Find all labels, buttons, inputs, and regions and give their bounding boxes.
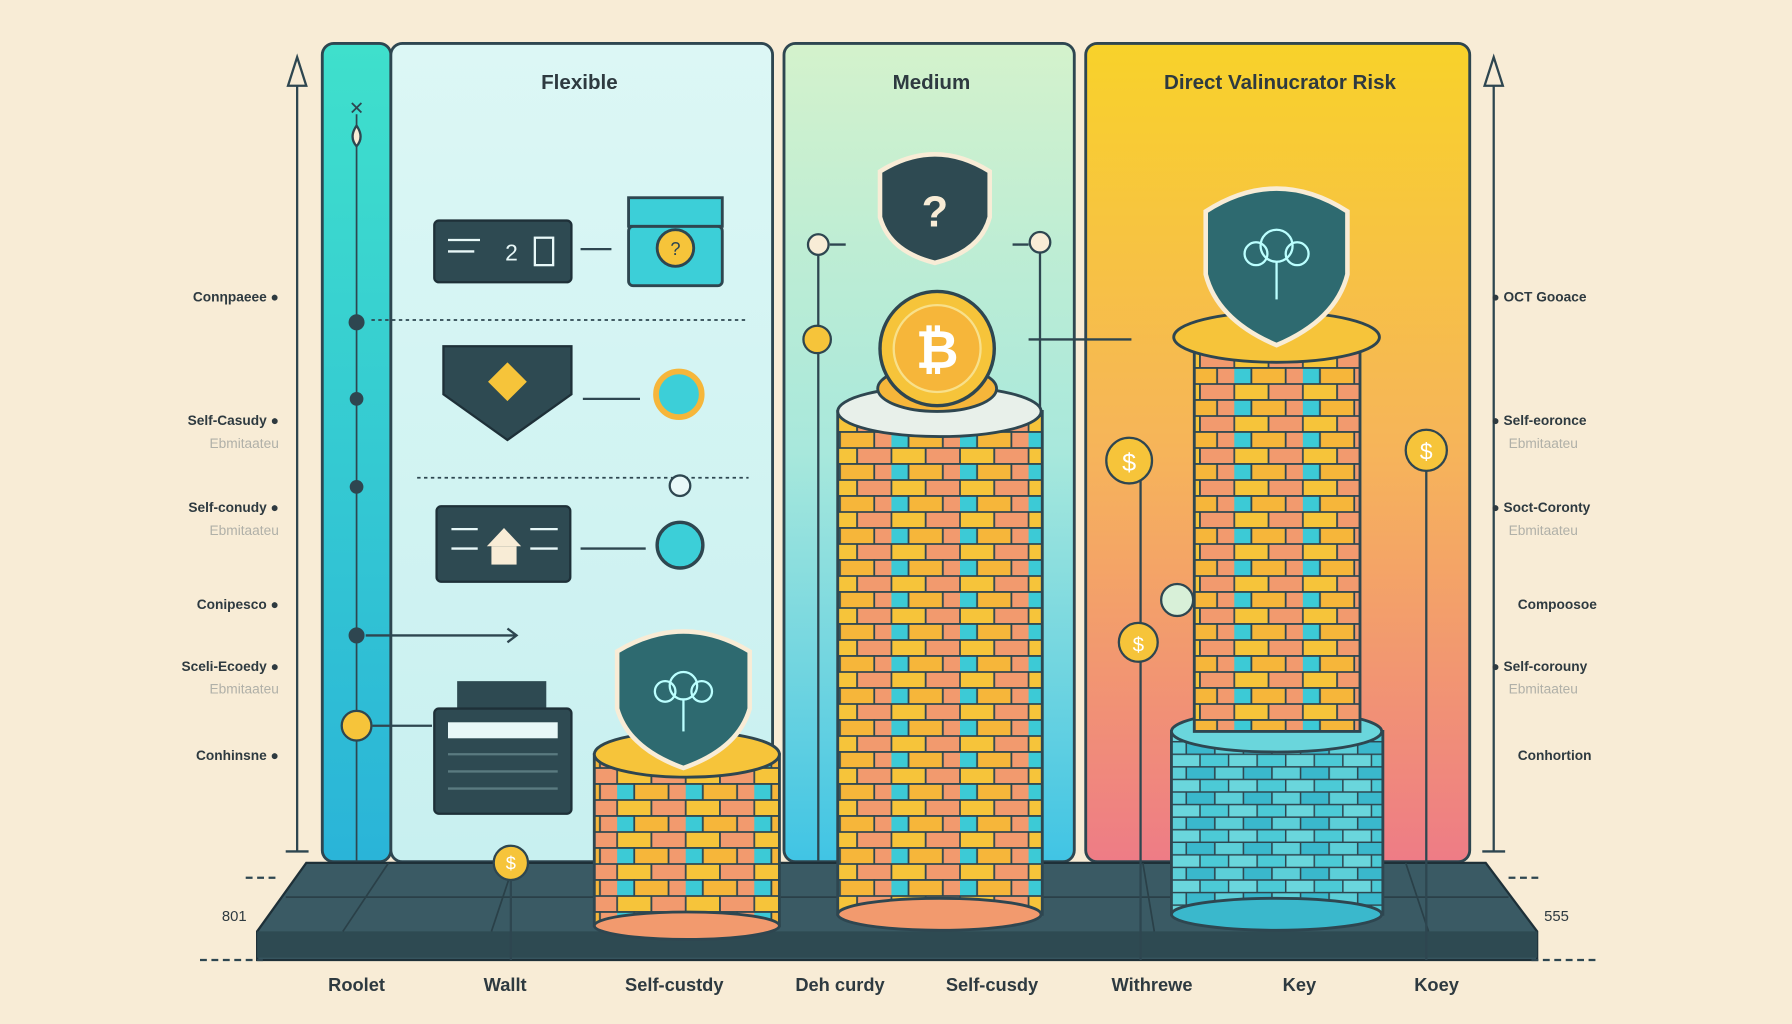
- icon: card: 2: [505, 240, 518, 266]
- stack: medium: [838, 291, 1042, 930]
- left axis labels: Conipesco ●: [197, 597, 279, 612]
- left strip: [322, 43, 391, 960]
- right axis labels: ● OCT Gooace: [1491, 290, 1587, 305]
- stack: small: $: [506, 853, 516, 874]
- left axis labels: Conηpaeee ●: [193, 290, 279, 305]
- panel: flexible: [366, 43, 773, 862]
- right axis labels: Conhortion: [1518, 748, 1592, 763]
- right axis arrow: [1482, 57, 1505, 851]
- heading: direct risk: Direct Valinucrator Risk: [1164, 71, 1397, 94]
- base platform: [200, 863, 1600, 960]
- icon: shield tree large: [1206, 189, 1347, 345]
- icon: shield question: ?: [922, 188, 948, 236]
- right axis labels: ● Self-eoronce: [1491, 413, 1587, 428]
- left axis labels: Sceli-Ecoedy ●: [181, 659, 279, 674]
- panel: medium: [784, 43, 1074, 960]
- bottom labels: Roolet: [328, 974, 385, 995]
- right axis labels: ● Soct-Coronty: [1491, 500, 1591, 515]
- icon: window coin: [629, 198, 722, 286]
- bottom labels: Self-cusdy: [946, 974, 1039, 995]
- left axis labels: Ebmitaateu: [210, 682, 279, 697]
- stack: large: [1106, 189, 1447, 960]
- bottom labels: Key: [1283, 974, 1317, 995]
- stack: large: $: [1420, 438, 1433, 464]
- icon: house card: [437, 475, 703, 582]
- heading: medium: Medium: [893, 71, 970, 94]
- icon: bitcoin coin: ₿: [916, 321, 959, 380]
- arrow: [366, 629, 517, 642]
- right axis labels: Ebmitaateu: [1509, 436, 1578, 451]
- panel: direct risk: [1029, 43, 1470, 862]
- icon: shield diamond: [443, 346, 702, 440]
- right axis labels: Compoosoe: [1518, 597, 1597, 612]
- left axis arrow: [286, 57, 309, 851]
- left axis labels: Self-conudy ●: [188, 500, 279, 515]
- left axis labels: Ebmitaateu: [210, 523, 279, 538]
- right axis labels: [1491, 290, 1597, 763]
- left axis labels: Ebmitaateu: [210, 436, 279, 451]
- right axis labels: ● Self-corouny: [1491, 659, 1588, 674]
- left strip: ✕: [349, 97, 364, 118]
- bottom labels: Wallt: [484, 974, 527, 995]
- base platform: 555: [1544, 909, 1569, 925]
- right axis labels: Ebmitaateu: [1509, 523, 1578, 538]
- left axis labels: Self-Casudy ●: [188, 413, 279, 428]
- bottom labels: Deh curdy: [795, 974, 885, 995]
- bottom labels: [328, 974, 1460, 995]
- bottom labels: Koey: [1414, 974, 1460, 995]
- base platform: 801: [222, 909, 247, 925]
- icon: bitcoin coin: [878, 291, 997, 411]
- icon: card: [434, 221, 611, 282]
- bottom labels: Withrewe: [1111, 974, 1193, 995]
- heading: flexible: Flexible: [541, 71, 618, 94]
- icon: shield tree: [617, 631, 750, 768]
- icon: shield question: [880, 154, 990, 263]
- icon: wallet: [373, 681, 571, 814]
- left axis labels: Conhinsne ●: [196, 748, 279, 763]
- stack: large: $: [1133, 633, 1145, 656]
- icon: window coin: ?: [670, 238, 681, 259]
- stack: large: $: [1122, 449, 1136, 477]
- bottom labels: Self-custdy: [625, 974, 724, 995]
- left axis labels: [181, 290, 279, 763]
- right axis labels: Ebmitaateu: [1509, 682, 1578, 697]
- stack: small: [494, 631, 779, 960]
